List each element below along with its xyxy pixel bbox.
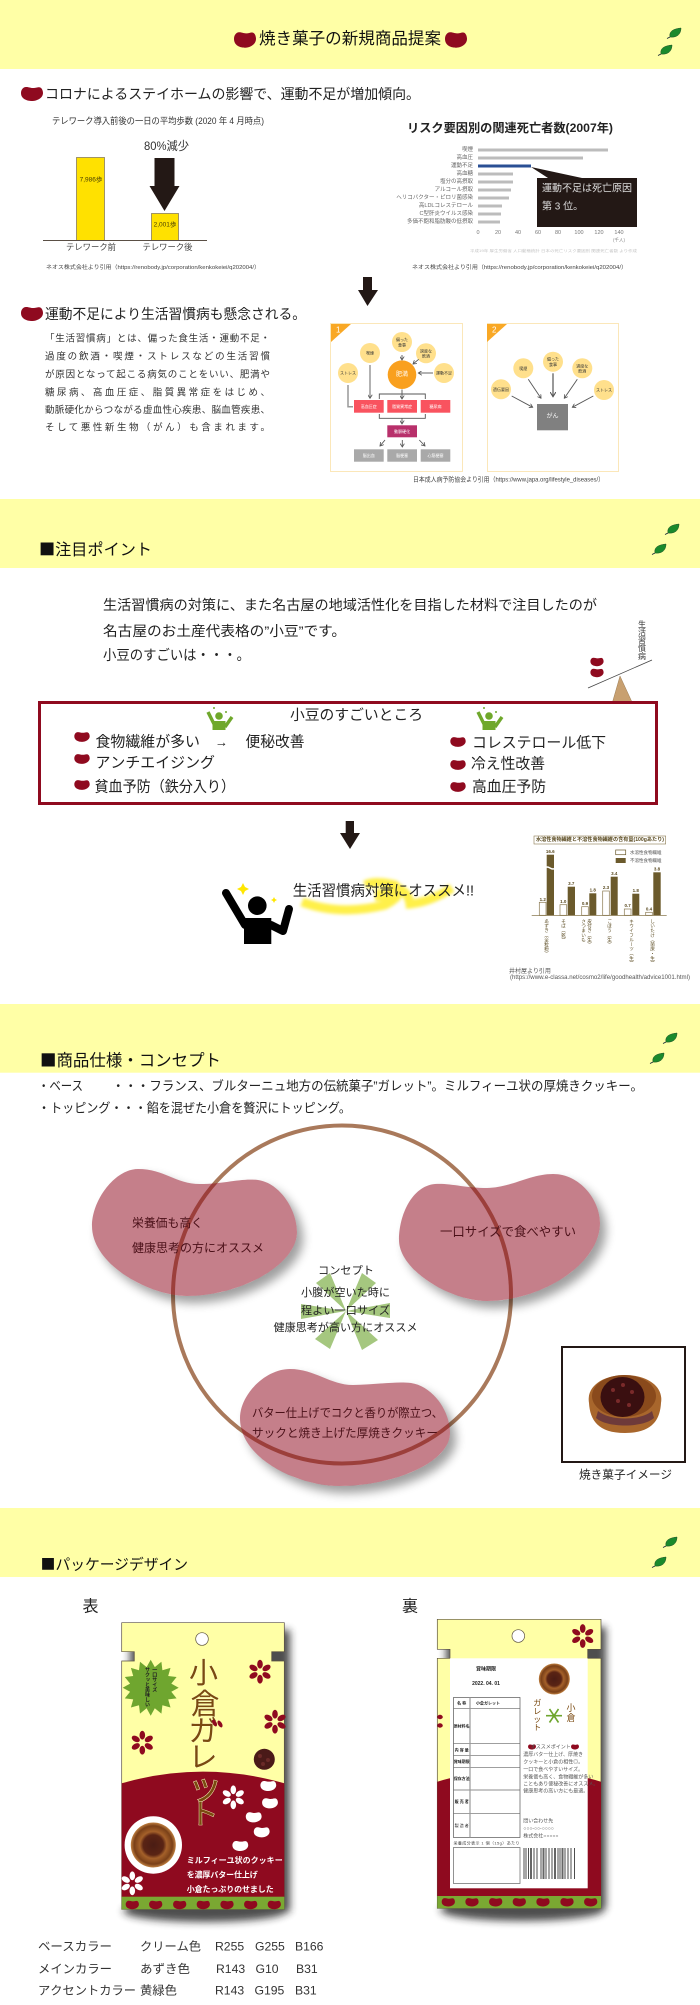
product name: ト xyxy=(189,1799,219,1831)
diagram panel 2: causes of cancer: 遺伝要因 xyxy=(493,386,509,392)
package copy: 小倉たっぷりのせました xyxy=(187,1884,274,1894)
text block: concept: コンセプト xyxy=(318,1264,374,1277)
table: product information: 原材料名 xyxy=(454,1722,470,1728)
bar chart: deaths by risk factor: 喫煙 xyxy=(462,145,473,153)
row: accent color xyxy=(38,1984,317,1998)
bar chart: dietary fiber content: 3.4 xyxy=(611,871,618,876)
product logo: 倉 xyxy=(566,1713,576,1723)
badge: green starburst: 一口サイズ xyxy=(151,1667,157,1693)
diagram panel 1: metabolic lifestyle diseases: 脳梗塞 xyxy=(396,452,408,458)
panel: azuki benefits xyxy=(40,702,656,804)
bar chart: deaths by risk factor: 高LDLコレステロール xyxy=(419,201,473,209)
bar chart: deaths by risk factor: 高血圧 xyxy=(456,153,473,161)
icon: green asterisk xyxy=(301,1273,390,1350)
icon: azuki cluster xyxy=(254,1749,275,1770)
badge: green starburst xyxy=(123,1660,179,1716)
recommendation note: オススメポイント！ xyxy=(531,1743,576,1750)
product logo: レ xyxy=(533,1707,541,1716)
bar chart: dietary fiber content xyxy=(532,836,667,965)
diagram panel 1: metabolic lifestyle diseases: 脂質異常症 xyxy=(392,403,412,409)
bar chart: dietary fiber content: 皮付き（生） xyxy=(587,918,592,947)
table: product information xyxy=(454,1698,520,1838)
row: accent color: B31 xyxy=(295,1984,317,1998)
table: product information: 小倉ガレット xyxy=(476,1700,500,1706)
table: product information: 賞味期限 xyxy=(454,1758,470,1764)
diagram panel 1: metabolic lifestyle diseases: 1 xyxy=(336,326,341,334)
text block: lifestyle disease description: そして悪性新生物（がん）も含まれます。 xyxy=(45,422,270,434)
bar chart: dietary fiber content: 16.6 xyxy=(546,849,555,854)
text block: lifestyle disease description xyxy=(45,332,270,434)
bar chart: deaths by risk factor: 100 xyxy=(574,230,584,236)
product logo xyxy=(533,1698,576,1732)
legend: 水溶性食物繊維 xyxy=(630,849,662,856)
bar chart: dietary fiber content: ごぼう（生） xyxy=(607,918,612,947)
row: main color: メインカラー xyxy=(38,1962,112,1976)
best before: 2022. 04. 01 xyxy=(472,1681,500,1687)
bar chart: dietary fiber content: しいたけ（菌床・生） xyxy=(650,919,656,965)
bar chart: average steps: テレワーク導入前後の一日の平均歩数 (2020 年 4 月時点) xyxy=(52,115,264,126)
bar chart: deaths by risk factor: C型肝炎ウイルス感染 xyxy=(420,209,473,217)
bar chart: dietary fiber content: そば（乾） xyxy=(561,919,566,942)
arrow: 80 percent decrease xyxy=(150,158,180,211)
bar chart: dietary fiber content: 2.3 xyxy=(603,885,610,890)
diagram panel 1: metabolic lifestyle diseases: 動脈硬化 xyxy=(394,428,410,434)
package copy: を濃厚バター仕上げ xyxy=(187,1870,258,1880)
white label area xyxy=(450,1658,588,1888)
bar chart: dietary fiber content: 3.8 xyxy=(654,866,661,872)
diagram panel 1: metabolic lifestyle diseases: 食事 xyxy=(398,342,406,348)
row: accent color: 黄緑色 xyxy=(140,1984,177,1998)
bean callout: nutrition: 健康思考の方にオススメ xyxy=(132,1240,264,1255)
list: benefits left: 食物繊維が多い xyxy=(96,732,200,750)
diagram panel 1: metabolic lifestyle diseases: 偏った xyxy=(396,336,408,342)
recommendation note: 栄養価も高く、食物繊維が多い xyxy=(523,1773,593,1780)
recommendation note: 健康思考の高い方にも最適。 xyxy=(523,1788,588,1795)
green bean strip xyxy=(122,1897,284,1909)
table: product information: 内 容 量 xyxy=(455,1746,469,1752)
icon: seesaw of beans against lifestyle disease xyxy=(588,619,652,702)
row: main color: G10 xyxy=(256,1962,279,1976)
diagram panel 1: metabolic lifestyle diseases: 喫煙 xyxy=(366,350,374,356)
color specification table xyxy=(38,1940,324,1998)
diagram panel 2: causes of cancer: 2 xyxy=(492,326,497,334)
flower xyxy=(571,1624,594,1648)
icon: bean left of title xyxy=(234,32,256,48)
flowers xyxy=(131,1660,287,1755)
row: base color: B166 xyxy=(295,1940,324,1954)
text block: concept: 健康思考が高い方にオススメ xyxy=(274,1320,418,1334)
icon: cheering person right xyxy=(478,707,502,730)
heading: lifestyle disease concern: 運動不足により生活習慣病も懸念される。 xyxy=(45,306,306,322)
row: main color xyxy=(38,1962,318,1976)
icon: leaves xyxy=(652,524,679,554)
diagram panel 1: metabolic lifestyle diseases: 心筋梗塞 xyxy=(428,452,444,458)
caption: baked sweet image: 焼き菓子イメージ xyxy=(579,1469,672,1482)
product logo: ト xyxy=(533,1723,541,1732)
diagram panel 1: metabolic lifestyle diseases: 高血圧症 xyxy=(361,403,377,409)
diagram panel 2: causes of cancer: 偏った xyxy=(547,356,559,362)
highlight stroke xyxy=(302,882,452,910)
recommendation text: 生活習慣病対策にオススメ!! xyxy=(293,882,474,900)
icon: leaves xyxy=(650,1033,677,1064)
diagram panel 1: metabolic lifestyle diseases: 飲酒 xyxy=(422,352,430,358)
list: benefits left: アンチエイジング xyxy=(96,754,215,772)
bar chart: deaths by risk factor: 塩分の高摂取 xyxy=(440,177,473,185)
bar chart: deaths by risk factor: (千人) xyxy=(613,236,625,244)
icon: cheering person left xyxy=(208,707,232,730)
bar chart: average steps: テレワーク前 xyxy=(66,242,116,252)
bean callout: butter flavor: バター仕上げでコクと香りが際立つ、 xyxy=(252,1405,443,1420)
heading: stay home lack of exercise: コロナによるステイホームの影響で、運動不足が増加傾向。 xyxy=(45,86,420,102)
bar chart: deaths by risk factor: 140 xyxy=(614,230,624,236)
white beans xyxy=(232,1781,278,1851)
package front xyxy=(121,1623,290,1922)
source note 4: 井村屋より引用 xyxy=(509,967,551,975)
heading: package design: ■パッケージデザイン xyxy=(41,1554,188,1574)
table: product information: 製 造 者 xyxy=(455,1822,469,1828)
bean callout: nutrition: 栄養価も高く xyxy=(132,1215,203,1230)
recommendation note xyxy=(523,1743,598,1839)
icon: seesaw of beans against lifestyle disease: 生活習慣病 xyxy=(638,619,646,661)
panel heading: 小豆のすごいところ xyxy=(290,707,423,724)
bean callout: butter flavor xyxy=(240,1369,450,1486)
diagram: concept circle with three beans xyxy=(92,1126,600,1486)
bar chart: average steps: 7,986歩 xyxy=(80,174,103,184)
bar chart: deaths by risk factor: リスク要因別の関連死亡者数(2007年) xyxy=(407,120,613,135)
row: accent color: R143 xyxy=(215,1984,244,1998)
product name: 倉 xyxy=(190,1689,220,1721)
bar chart: deaths by risk factor: 多価不飽和脂肪酸の低摂取 xyxy=(407,217,473,225)
product logo: ッ xyxy=(533,1715,541,1724)
recommendation note: 問い合わせ先 xyxy=(523,1818,553,1825)
heading: attention point: ■注目ポイント xyxy=(39,536,152,560)
text block: product specification: ・ベース xyxy=(38,1078,83,1094)
recommendation note: クッキーと小倉の相性◎。 xyxy=(523,1758,583,1765)
bar chart: dietary fiber content: キウイフルーツ（生） xyxy=(629,919,634,965)
source note 4: (https://www.e-classa.net/cosmo2/life/goodhealth/advice1001.html) xyxy=(510,975,690,981)
arrow: down to recommendation xyxy=(340,821,360,849)
text block: lifestyle disease description: 動脈硬化からつながる虚血性心疾患、脳血管疾患、 xyxy=(45,404,270,416)
diagram panel 2: causes of cancer: がん xyxy=(546,412,559,420)
bar chart: deaths by risk factor: 120 xyxy=(594,230,604,236)
recommendation note: 濃厚バター仕上げ、厚焼き xyxy=(523,1751,583,1758)
row: base color: ベースカラー xyxy=(38,1940,112,1954)
list: benefits left: → xyxy=(215,734,228,750)
legend xyxy=(616,849,662,864)
diagram panel 1: metabolic lifestyle diseases: 運動不足 xyxy=(436,370,452,376)
bar chart: average steps: テレワーク後 xyxy=(142,242,193,252)
row: accent color: アクセントカラー xyxy=(38,1984,136,1998)
heading: product concept: ■商品仕様・コンセプト xyxy=(40,1047,221,1071)
product name: 小 xyxy=(189,1658,218,1690)
diagram panel 1: metabolic lifestyle diseases: 過度な xyxy=(420,348,432,354)
product name: ガ xyxy=(188,1716,218,1748)
bar chart: deaths by risk factor xyxy=(396,120,638,253)
bar chart: dietary fiber content: 1.2 xyxy=(540,897,546,902)
text block: lifestyle disease description: が原因となって起こる病気のことをいい、肥満や xyxy=(45,368,270,380)
diagram panel 1: metabolic lifestyle diseases: 肥満 xyxy=(396,370,408,378)
list: benefits right xyxy=(450,734,606,796)
green bean strip xyxy=(437,1896,601,1908)
bean callout: bite size: 一口サイズで食べやすい xyxy=(440,1224,576,1239)
diagram panel 2: causes of cancer xyxy=(487,324,618,472)
source note 3: 日本成人病予防協会より引用（https://www.japa.org/lifestyle_diseases/） xyxy=(413,474,604,484)
icon: leaves xyxy=(652,1537,677,1568)
bar chart: deaths by risk factor: 80 xyxy=(555,230,561,236)
diagram panel 2: causes of cancer: 喫煙 xyxy=(519,365,527,371)
bar chart: deaths by risk factor: 60 xyxy=(535,230,541,236)
icon: leaves xyxy=(658,28,681,56)
text block: product specification: ・トッピング・・・餡を混ぜた小倉を贅沢にトッピング。 xyxy=(38,1100,351,1116)
text block: why azuki: 名古屋のお土産代表格の”小豆”です。 xyxy=(103,623,346,639)
nutrition box xyxy=(454,1840,520,1884)
product logo: ガ xyxy=(533,1698,541,1708)
icon: cheering person with sparkles xyxy=(226,883,289,944)
product name xyxy=(187,1658,223,1831)
bar chart: deaths by risk factor: 平成19年 厚生労働省 人口動態統計 日本の死亡リスク要因別 関連死亡者数 より作成 xyxy=(470,248,638,253)
recommendation note: ○○○-○○-○○○○ xyxy=(523,1826,554,1832)
bar chart: dietary fiber content: 3.7 xyxy=(568,881,575,886)
package copy: ミルフィーユ状のクッキー xyxy=(187,1855,283,1865)
bar chart: dietary fiber content: さつまいも xyxy=(581,919,586,942)
bar chart: deaths by risk factor: 0 xyxy=(476,230,480,236)
bar chart: dietary fiber content: 1.8 xyxy=(633,888,639,893)
bar chart: deaths by risk factor: 運動不足 xyxy=(451,161,473,169)
list: benefits left xyxy=(74,732,304,796)
section band: package design xyxy=(0,1508,700,1577)
bar chart: deaths by risk factor: ヘリコバクター・ピロリ菌感染 xyxy=(396,193,473,201)
icon: cookie xyxy=(589,1375,661,1433)
recommendation note: こともあり便秘改善にオススメ。 xyxy=(523,1780,598,1787)
nutrition box: 栄養成分表示 1 個（15g）あたり xyxy=(454,1840,520,1846)
image frame: baked sweet xyxy=(562,1347,685,1462)
text block: lifestyle disease description: 過度の飲酒・喫煙・ストレスなどの生活習慣 xyxy=(45,350,270,362)
product name: レ xyxy=(188,1742,218,1774)
bar chart: dietary fiber content: 0.4 xyxy=(646,906,653,912)
text block: lifestyle disease description: 「生活習慣病」とは、偏った食生活・運動不足・ xyxy=(45,332,270,344)
list: benefits right: 冷え性改善 xyxy=(471,756,545,772)
package back xyxy=(437,1619,606,1921)
source note 1: ネオス株式会社より引用（https://renobody.jp/corporation/kenkokeiei/q202004/） xyxy=(46,263,260,271)
text block: why azuki xyxy=(103,597,597,663)
bar chart: dietary fiber content: 1.0 xyxy=(560,899,567,904)
diagram panel 1: metabolic lifestyle diseases xyxy=(330,324,462,472)
bar chart: average steps xyxy=(43,115,264,252)
row: main color: B31 xyxy=(296,1962,318,1976)
photo: cookie xyxy=(539,1664,570,1694)
row: accent color: G195 xyxy=(254,1984,285,1998)
bar chart: deaths by risk factor: 高血糖 xyxy=(456,169,473,177)
best before: 賞味期限 xyxy=(476,1665,496,1672)
arrow: down to lifestyle disease xyxy=(358,277,378,306)
table: product information: 保存方法 xyxy=(454,1775,470,1781)
bar chart: dietary fiber content: あずき（全粒粉） xyxy=(544,919,550,956)
bar chart: deaths by risk factor: 40 xyxy=(515,230,521,236)
callout: third leading cause xyxy=(531,167,637,227)
diagram panel 2: causes of cancer: 食事 xyxy=(549,361,557,367)
title: 焼き菓子の新規商品提案 xyxy=(259,29,442,48)
recommendation note: 株式会社○○○○○ xyxy=(523,1832,558,1839)
callout: third leading cause: 第 3 位。 xyxy=(542,200,583,212)
source note 2: ネオス株式会社より引用（https://renobody.jp/corporation/kenkokeiei/q202004/） xyxy=(412,263,627,271)
text block: why azuki: 生活習慣病の対策に、また名古屋の地域活性化を目指した材料で注目したのが xyxy=(103,597,597,613)
text block: concept xyxy=(274,1264,418,1334)
row: main color: あずき色 xyxy=(140,1962,190,1976)
text block: lifestyle disease description: 糖尿病、高血圧症、脂質異常症をはじめ、 xyxy=(45,386,270,398)
row: base color xyxy=(38,1940,324,1954)
list: benefits right: 高血圧予防 xyxy=(472,778,546,796)
icon: bean right of title xyxy=(445,32,467,48)
bar chart: average steps: 80%減少 xyxy=(144,138,189,153)
row: base color: G255 xyxy=(255,1940,285,1954)
photo: cookie on plate xyxy=(125,1816,182,1874)
bean callout: butter flavor: サックと焼き上げた厚焼きクッキー xyxy=(252,1426,438,1440)
diagram panel 1: metabolic lifestyle diseases: ストレス xyxy=(340,370,356,376)
source note 4 xyxy=(509,967,690,981)
section: title band xyxy=(0,0,700,69)
section band: attention point xyxy=(0,499,700,568)
product logo: 小 xyxy=(566,1703,576,1713)
label: back: 裏 xyxy=(402,1598,418,1616)
bar chart: deaths by risk factor: アルコール摂取 xyxy=(435,185,473,193)
recommendation note: 一口で食べやすいサイズ。 xyxy=(523,1766,583,1773)
pack shadow xyxy=(123,1630,290,1922)
diagram panel 1: metabolic lifestyle diseases: 糖尿病 xyxy=(430,403,442,409)
bean callout: bite size xyxy=(399,1174,600,1301)
bean callout: nutrition xyxy=(92,1169,297,1296)
callout: third leading cause: 運動不足は死亡原因 xyxy=(542,182,632,194)
table: product information: 販 売 者 xyxy=(455,1798,469,1804)
text block: concept: 程よい一口サイズ xyxy=(301,1303,390,1317)
package copy xyxy=(187,1855,283,1894)
diagram panel 1: metabolic lifestyle diseases: 脳出血 xyxy=(363,452,375,458)
diagram panel 2: causes of cancer: 飲酒 xyxy=(578,368,586,374)
barcode xyxy=(524,1848,574,1879)
text block: concept: 小腹が空いた時に xyxy=(301,1285,390,1299)
best before xyxy=(472,1665,500,1687)
pack shadow xyxy=(440,1627,606,1921)
diagram panel 2: causes of cancer: 過度な xyxy=(576,362,588,368)
bar chart: dietary fiber content: 0.7 xyxy=(624,903,631,908)
list: benefits right: コレステロール低下 xyxy=(472,734,606,752)
bar chart: dietary fiber content: 水溶性食物繊維と不溶性食物繊維の含有量(100gあたり) xyxy=(536,836,664,843)
section band: product concept xyxy=(0,1004,700,1073)
label: front: 表 xyxy=(82,1598,99,1616)
list: benefits left: 貧血予防（鉄分入り） xyxy=(94,778,235,796)
diagram panel 2: causes of cancer: ストレス xyxy=(596,388,612,392)
bar chart: average steps: 2,001歩 xyxy=(154,220,177,228)
text block: product specification xyxy=(38,1078,643,1116)
text block: product specification: ・・・フランス、ブルターニュ地方の伝統菓子”ガレット”。ミルフィーユ状の厚焼きクッキー。 xyxy=(112,1078,643,1094)
legend: 不溶性食物繊維 xyxy=(630,857,662,864)
row: base color: クリーム色 xyxy=(140,1940,201,1954)
badge: green starburst: サクッと美味しい xyxy=(144,1667,150,1707)
bar chart: dietary fiber content: 1.8 xyxy=(590,888,596,892)
bar chart: deaths by risk factor: 20 xyxy=(495,230,501,236)
row: main color: R143 xyxy=(216,1962,245,1976)
row: base color: R255 xyxy=(215,1940,244,1954)
text block: why azuki: 小豆のすごいは・・・。 xyxy=(103,647,250,663)
list: benefits left: 便秘改善 xyxy=(246,734,304,750)
product name: ッ xyxy=(187,1768,223,1808)
table: product information: 名 称 xyxy=(457,1700,466,1706)
bar chart: dietary fiber content: 0.9 xyxy=(582,901,589,906)
